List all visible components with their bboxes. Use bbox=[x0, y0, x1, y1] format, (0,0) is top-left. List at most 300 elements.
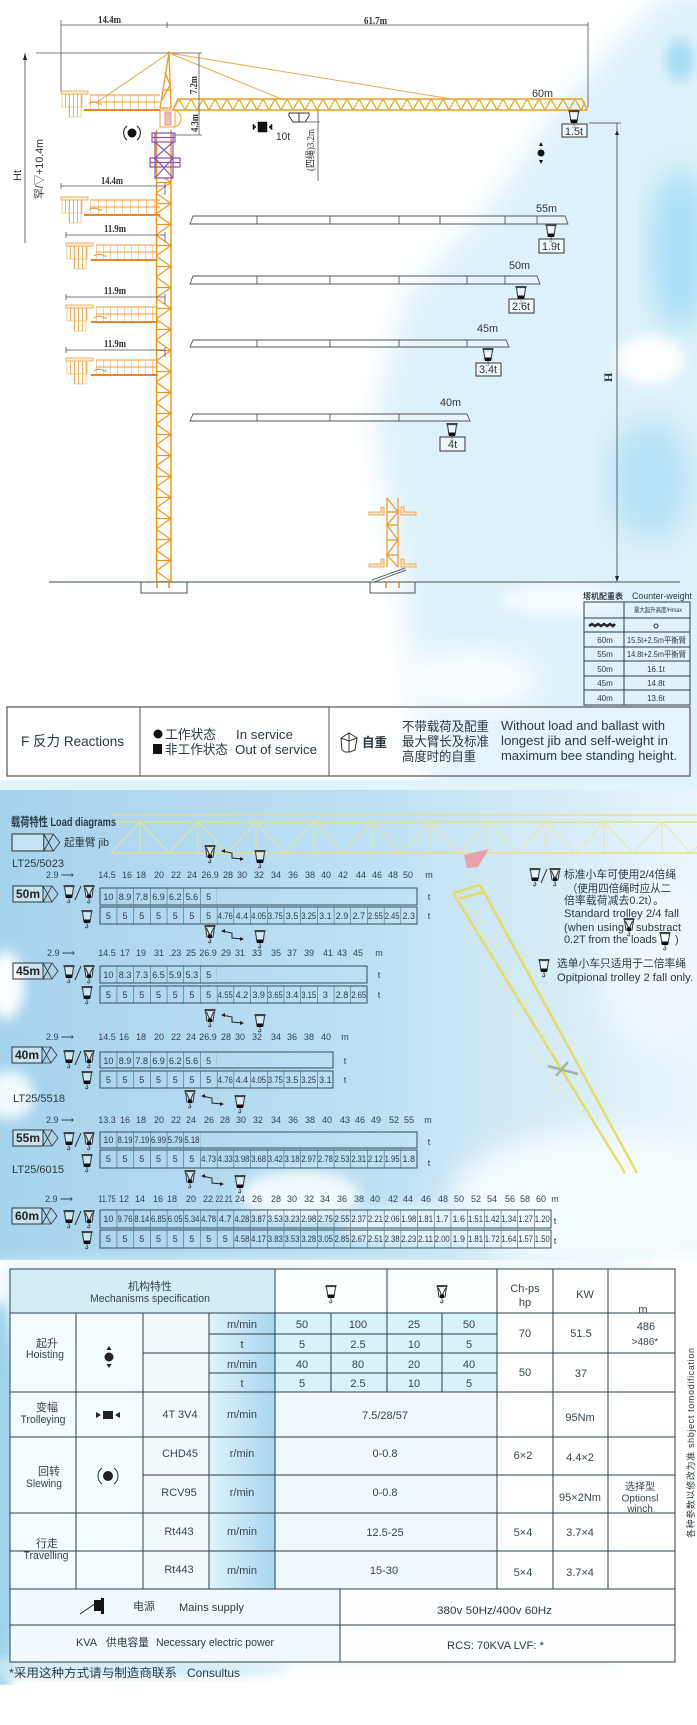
load table 50m: 24 bbox=[187, 870, 197, 880]
load table 60m: 54 bbox=[487, 1194, 497, 1204]
row: hoisting: 20 bbox=[408, 1359, 420, 1371]
header row: 机构特性 bbox=[128, 1279, 172, 1293]
main jib 60m: 1.5t bbox=[565, 126, 583, 138]
load table 50m: 5 bbox=[173, 911, 178, 921]
load table 60m: 12 bbox=[119, 1194, 129, 1204]
load table 50m: 5 bbox=[156, 911, 161, 921]
load table 55m: 34 bbox=[271, 1115, 281, 1125]
self weight description: 不带载荷及配重 bbox=[402, 719, 489, 734]
counter jib option 11.9m C: 11.9m bbox=[104, 339, 127, 350]
service states: 工作状态 bbox=[165, 727, 216, 742]
load table 40m: 18 bbox=[136, 1032, 146, 1042]
load table 60m: 1.27 bbox=[518, 1214, 533, 1224]
load table 60m: 2.75 bbox=[318, 1214, 333, 1224]
footnote: *采用这种方式请与制造商联系 bbox=[9, 1665, 177, 1680]
counter jib option 11.9m B: 11.9m bbox=[104, 286, 127, 297]
load table 50m: 14.5 bbox=[98, 870, 116, 880]
load table 60m: 2.23 bbox=[401, 1234, 416, 1244]
load table 45m: t bbox=[378, 990, 381, 1000]
load table 45m: 25 bbox=[186, 948, 196, 958]
header row: hp bbox=[519, 1297, 531, 1309]
counter-weight table: 最大起升高度/Hmax bbox=[634, 605, 683, 614]
load table 60m: 30 bbox=[287, 1194, 297, 1204]
load table 45m: 3.4 bbox=[286, 990, 298, 1000]
row: slewing: RCV95 bbox=[161, 1487, 197, 1499]
load table 50m: 36 bbox=[288, 870, 298, 880]
load table 60m: 5 bbox=[206, 1234, 211, 1244]
counter jib top bbox=[61, 91, 160, 117]
load table 55m: 2.9 ⟶ bbox=[46, 1115, 74, 1125]
load table 55m: 36 bbox=[288, 1115, 298, 1125]
load table 50m: 38 bbox=[305, 870, 315, 880]
counter-weight table: 14.8t+2.5m平衡臂 bbox=[627, 649, 686, 659]
load table 60m: 2.37 bbox=[351, 1214, 366, 1224]
load table 60m: 1.72 bbox=[485, 1234, 500, 1244]
row: travelling: 5×4 bbox=[514, 1527, 532, 1539]
load table 45m: 8.3 bbox=[119, 970, 131, 980]
load table 50m: 40 bbox=[321, 870, 331, 880]
row: hoisting: m/min bbox=[227, 1319, 257, 1331]
load table 60m: 6.85 bbox=[151, 1214, 166, 1224]
height dimension Ht: 罕/▽+10.4m bbox=[34, 139, 46, 199]
load table 45m: 45 bbox=[353, 948, 363, 958]
counter-weight table: 40m bbox=[597, 694, 613, 703]
jib legend: LT25/5023 bbox=[12, 858, 64, 870]
load table 45m: 4.2 bbox=[236, 990, 248, 1000]
load table 40m: 10 bbox=[103, 1056, 113, 1066]
row: trolleying: 95Nm bbox=[565, 1412, 595, 1424]
load table 45m: .23 bbox=[169, 948, 181, 958]
load table 60m: 4.17 bbox=[251, 1234, 266, 1244]
row: mains supply: 电源 bbox=[133, 1599, 155, 1613]
row: hoisting: 5 bbox=[299, 1378, 305, 1390]
load table 50m: m bbox=[425, 870, 433, 880]
load table 50m: 4.05 bbox=[251, 911, 266, 921]
slewing unit and climbing cage bbox=[150, 110, 181, 178]
load table 55m: 5 bbox=[173, 1154, 178, 1164]
load table 45m: 33 bbox=[252, 948, 262, 958]
load table 45m: 31 bbox=[154, 948, 164, 958]
row: trolleying bbox=[20, 1400, 595, 1426]
load table 60m: 1.57 bbox=[518, 1234, 533, 1244]
load table 55m: 20 bbox=[154, 1115, 164, 1125]
load table 40m: 40m bbox=[15, 1048, 39, 1062]
load table 55m: 3.68 bbox=[251, 1154, 266, 1164]
load table 45m: 5.3 bbox=[186, 970, 198, 980]
load table 60m: 1.98 bbox=[401, 1214, 416, 1224]
load table 45m: 5 bbox=[139, 990, 144, 1000]
counter-weight table: 55m bbox=[597, 650, 613, 659]
load table 55m: 3.42 bbox=[268, 1154, 283, 1164]
load table 45m: 5 bbox=[206, 970, 211, 980]
load table 55m: t bbox=[428, 1137, 431, 1147]
load table 50m: 18 bbox=[136, 870, 146, 880]
row: slewing: 6×2 bbox=[514, 1450, 532, 1462]
trolley notes: substract bbox=[636, 922, 681, 934]
load table 55m: 3.18 bbox=[284, 1154, 300, 1164]
load table 60m: 16 bbox=[153, 1194, 163, 1204]
load table 45m: 5 bbox=[206, 990, 211, 1000]
load table 60m: 4.58 bbox=[234, 1234, 249, 1244]
counter-weight table: 16.1t bbox=[647, 665, 666, 674]
trolley notes: Standard trolley 2/4 fall bbox=[564, 908, 679, 920]
table shading bbox=[10, 1269, 675, 1662]
trolley notes: 倍率载荷减去0.2t）。 bbox=[564, 893, 664, 907]
row: hoisting: 51.5 bbox=[570, 1328, 592, 1340]
load table 40m: 40 bbox=[321, 1032, 331, 1042]
load table 60m: 1.81 bbox=[418, 1214, 433, 1224]
load table 60m: 14 bbox=[135, 1194, 145, 1204]
header row: m bbox=[638, 1304, 648, 1316]
trolley and 10t load with hook height: 10t bbox=[276, 131, 290, 143]
load table 40m: 32 bbox=[252, 1032, 262, 1042]
load table 40m: 6.9 bbox=[152, 1056, 165, 1066]
load table 40m: 34 bbox=[271, 1032, 281, 1042]
load table 40m: 22 bbox=[171, 1032, 181, 1042]
load table 40m: 36 bbox=[287, 1032, 297, 1042]
trolley notes: 标准小车可使用2/4倍绳 bbox=[564, 867, 676, 881]
trolley and 10t load with hook height bbox=[253, 110, 320, 181]
row: necessary electric power: RCS: 70KVA LVF: * bbox=[447, 1640, 545, 1652]
load table 50m: t bbox=[428, 892, 431, 902]
row: travelling: m/min bbox=[227, 1526, 257, 1538]
row: hoisting: Hoisting bbox=[26, 1349, 64, 1361]
row: slewing: 回转 bbox=[38, 1464, 60, 1478]
load table 50m: 42 bbox=[338, 870, 348, 880]
row: hoisting: t bbox=[240, 1378, 244, 1390]
row: hoisting: 2.5 bbox=[350, 1339, 366, 1351]
trolley notes: Opitpional trolley 2 fall only. bbox=[557, 972, 693, 984]
load table 60m: 2.00 bbox=[435, 1234, 450, 1244]
height dimension Ht bbox=[12, 53, 46, 243]
load table 55m: 1.95 bbox=[385, 1154, 400, 1164]
counter-weight table: 塔机配重表 bbox=[583, 591, 623, 601]
load table 50m: 5.6 bbox=[186, 892, 198, 902]
erection mast section bbox=[369, 498, 416, 567]
counter jib option 11.9m B bbox=[66, 286, 165, 331]
icon: hoisting bbox=[538, 142, 544, 164]
row: hoisting: 10 bbox=[408, 1339, 420, 1351]
load table 60m: 2.98 bbox=[301, 1214, 316, 1224]
counter jib option 14.4m: 14.4m bbox=[101, 176, 124, 187]
load table 40m: 28 bbox=[221, 1032, 231, 1042]
trolley notes: 0.2T from the loads bbox=[564, 934, 658, 946]
load table 45m: 10 bbox=[103, 970, 113, 980]
load table 55m: 6.99 bbox=[151, 1135, 166, 1145]
counter-weight table: 13.6t bbox=[647, 694, 666, 703]
counter-weight table: 60m bbox=[597, 636, 613, 645]
load table 50m: 10 bbox=[103, 892, 113, 902]
load table 45m: 5 bbox=[173, 990, 178, 1000]
load table 60m: 5 bbox=[139, 1234, 144, 1244]
row: travelling: Rt443 bbox=[164, 1526, 194, 1538]
load table 50m: 22 bbox=[171, 870, 181, 880]
load table 60m: 50 bbox=[454, 1194, 464, 1204]
jib option 50m: 2.6t bbox=[512, 301, 530, 313]
table grid lines bbox=[10, 1269, 675, 1662]
self weight description: maximum bee standing height. bbox=[501, 748, 677, 763]
counter-weight table: 14.8t bbox=[647, 679, 666, 688]
reactions label: F 反力 Reactions bbox=[21, 733, 124, 749]
row: hoisting: 5 bbox=[466, 1378, 472, 1390]
load table 45m: 2.65 bbox=[351, 990, 366, 1000]
load table 60m: 22 bbox=[203, 1194, 213, 1204]
load table 60m: 28 bbox=[271, 1194, 281, 1204]
jib option 45m: 45m bbox=[477, 323, 498, 335]
load table 60m: 52 bbox=[471, 1194, 481, 1204]
load table 40m: 5 bbox=[106, 1075, 111, 1085]
load table 40m: 20 bbox=[154, 1032, 164, 1042]
load table 40m: 4.76 bbox=[218, 1075, 233, 1085]
self weight description bbox=[402, 718, 677, 764]
load table 60m: 11.75 bbox=[98, 1194, 116, 1204]
load table 55m: 32 bbox=[253, 1115, 263, 1125]
load table 55m: 5.18 bbox=[184, 1135, 199, 1145]
load table 45m: 37 bbox=[287, 948, 297, 958]
load table 60m: 24 bbox=[235, 1194, 245, 1204]
load table 60m: 20 bbox=[186, 1194, 196, 1204]
ground line and foundations bbox=[49, 568, 680, 593]
load table 55m: 2.53 bbox=[334, 1154, 350, 1164]
load table 45m: 5 bbox=[106, 990, 111, 1000]
mechanisms specification table bbox=[10, 1269, 675, 1662]
row: hoisting: 40 bbox=[296, 1359, 308, 1371]
load table 40m: t bbox=[344, 1056, 347, 1066]
load table 60m: 42 bbox=[388, 1194, 398, 1204]
load table 55m: 13.3 bbox=[98, 1115, 116, 1125]
header row: Mechanisms specification bbox=[90, 1293, 210, 1305]
row: hoisting: t bbox=[240, 1339, 244, 1351]
row: mains supply: 380v 50Hz/400v 60Hz bbox=[437, 1605, 552, 1617]
row: necessary electric power bbox=[76, 1635, 545, 1652]
load table 60m: 9.76 bbox=[118, 1214, 132, 1224]
row: hoisting: 25 bbox=[408, 1319, 420, 1331]
load table 60m: 2.55 bbox=[334, 1214, 350, 1224]
load table 50m: 2.7 bbox=[352, 911, 365, 921]
load table 50m: 30 bbox=[237, 870, 247, 880]
load table 60m bbox=[12, 1170, 559, 1249]
counter jib option 11.9m C bbox=[66, 339, 165, 384]
load table 60m: m bbox=[551, 1194, 559, 1204]
load table 60m: 60 bbox=[536, 1194, 546, 1204]
load table 50m: 48 bbox=[388, 870, 398, 880]
dimension: overall jib lengths: 14.4m bbox=[98, 15, 122, 26]
load table 50m: 34 bbox=[271, 870, 281, 880]
load table 55m: 3.98 bbox=[234, 1154, 249, 1164]
dimension: overall jib lengths bbox=[61, 15, 588, 108]
load table 50m: 16 bbox=[122, 870, 132, 880]
load table 40m: 5.6 bbox=[186, 1056, 198, 1066]
load table 40m: 26.9 bbox=[199, 1032, 217, 1042]
load table 45m: 7.3 bbox=[136, 970, 148, 980]
load table 50m: 28 bbox=[223, 870, 233, 880]
row: trolleying: Trolleying bbox=[20, 1414, 66, 1426]
load table 60m: 1.50 bbox=[535, 1234, 550, 1244]
load table 55m: 28 bbox=[220, 1115, 230, 1125]
row: hoisting: 37 bbox=[575, 1368, 587, 1380]
load table 40m: 5 bbox=[189, 1075, 194, 1085]
service states: 非工作状态 bbox=[165, 742, 228, 757]
load table 55m: 8.19 bbox=[118, 1135, 132, 1145]
load table 60m: 2.9 ⟶ bbox=[45, 1194, 73, 1204]
row: travelling: Rt443 bbox=[164, 1564, 194, 1576]
load table 50m: 50 bbox=[403, 870, 413, 880]
load table 55m: 46 bbox=[355, 1115, 365, 1125]
jib option 45m bbox=[190, 323, 509, 376]
row: travelling: 3.7×4 bbox=[566, 1567, 594, 1579]
load table 40m: 3.75 bbox=[268, 1075, 283, 1085]
load table 40m: 24 bbox=[186, 1032, 196, 1042]
load table 50m: 7.8 bbox=[136, 892, 148, 902]
row: hoisting: 50 bbox=[296, 1319, 308, 1331]
row: necessary electric power: 供电容量 bbox=[106, 1635, 149, 1649]
row: slewing: winch bbox=[626, 1504, 653, 1515]
dimension 7.2m and 4.3m: 4.3m bbox=[190, 113, 201, 132]
load table 60m: 5 bbox=[122, 1234, 128, 1244]
load table 45m: 6.5 bbox=[152, 970, 165, 980]
load table 60m: 3.23 bbox=[284, 1214, 300, 1224]
trolley and 10t load with hook height: (四绳)3.2m bbox=[304, 129, 317, 171]
jib option 55m: 55m bbox=[536, 203, 557, 215]
footnote: Consultus bbox=[187, 1666, 240, 1680]
jib option 40m: 40m bbox=[440, 397, 461, 409]
load table 50m: 2.3 bbox=[403, 911, 415, 921]
row: hoisting: 起升 bbox=[36, 1337, 58, 1350]
load table 40m: 3.25 bbox=[301, 1075, 316, 1085]
load table 60m: 60m bbox=[15, 1209, 39, 1223]
load table 60m: 32 bbox=[304, 1194, 314, 1204]
model label LT25/6015: LT25/6015 bbox=[12, 1164, 64, 1176]
load table 45m: 3 bbox=[323, 990, 328, 1000]
row: travelling: m/min bbox=[227, 1565, 257, 1577]
load table 55m: 2.12 bbox=[368, 1154, 383, 1164]
icon: self weight bbox=[341, 733, 357, 752]
load table 55m: 2.31 bbox=[351, 1154, 366, 1164]
load table 50m: 3.25 bbox=[301, 911, 316, 921]
load table 60m: 3.87 bbox=[251, 1214, 266, 1224]
load table 55m: 4.33 bbox=[218, 1154, 233, 1164]
row: necessary electric power: KVA bbox=[76, 1637, 98, 1649]
counter-weight table bbox=[583, 591, 692, 705]
row: hoisting bbox=[26, 1319, 658, 1390]
counter jib option 11.9m A: 11.9m bbox=[104, 224, 127, 235]
load table 50m: 3.5 bbox=[286, 911, 298, 921]
service states bbox=[153, 727, 317, 757]
load table 60m: 48 bbox=[438, 1194, 448, 1204]
service states: In service bbox=[236, 727, 293, 742]
load table 40m: 30 bbox=[235, 1032, 245, 1042]
load table 45m: 31 bbox=[235, 948, 245, 958]
load table 55m: 4.73 bbox=[201, 1154, 216, 1164]
load table 55m: 16 bbox=[120, 1115, 130, 1125]
load table 45m: 5.9 bbox=[169, 970, 181, 980]
row: hoisting: >486* bbox=[632, 1337, 658, 1348]
load table 40m: 14.5 bbox=[98, 1032, 116, 1042]
load table 45m: m bbox=[375, 948, 383, 958]
jib option 55m bbox=[190, 203, 568, 253]
load table 60m: 18 bbox=[167, 1194, 177, 1204]
load table 45m: 2.8 bbox=[336, 990, 348, 1000]
load table 60m: 44 bbox=[403, 1194, 413, 1204]
load table 60m: 1.20 bbox=[535, 1214, 550, 1224]
load table 60m: t bbox=[554, 1236, 557, 1246]
load table 40m: m bbox=[341, 1032, 349, 1042]
load table 40m: 16 bbox=[119, 1032, 129, 1042]
load table 60m: 6.05 bbox=[168, 1214, 183, 1224]
load table 60m: 1.34 bbox=[501, 1214, 516, 1224]
load table 60m: 40 bbox=[370, 1194, 380, 1204]
load table 60m: 56 bbox=[505, 1194, 515, 1204]
load table 45m: 3.15 bbox=[301, 990, 316, 1000]
load table 60m: 4.28 bbox=[234, 1214, 249, 1224]
main crane elevation drawing bbox=[12, 15, 680, 593]
model label LT25/5518: LT25/5518 bbox=[13, 1093, 65, 1105]
load table 60m: 34 bbox=[320, 1194, 330, 1204]
counter-weight table: 45m bbox=[597, 679, 613, 688]
load table 45m: 29 bbox=[221, 948, 231, 958]
row: hoisting: 40 bbox=[463, 1359, 475, 1371]
trolley notes bbox=[530, 867, 693, 984]
load table 50m: 5 bbox=[206, 911, 211, 921]
load table 50m: 6.9 bbox=[152, 892, 165, 902]
load table 45m: 5 bbox=[189, 990, 194, 1000]
load table 50m: 32 bbox=[254, 870, 264, 880]
row: trolleying: 变幅 bbox=[36, 1400, 58, 1414]
counter-weight table: 50m bbox=[597, 665, 613, 674]
self weight label: 自重 bbox=[362, 735, 387, 750]
row: travelling bbox=[24, 1526, 594, 1579]
load table 60m: 46 bbox=[421, 1194, 431, 1204]
row: trolleying: 7.5/28/57 bbox=[362, 1410, 408, 1422]
load table 60m: 26 bbox=[252, 1194, 262, 1204]
self weight description: longest jib and self-weight in bbox=[501, 733, 668, 748]
load table 40m: 38 bbox=[304, 1032, 314, 1042]
load table 50m: 2.9 ⟶ bbox=[46, 870, 74, 880]
load table 60m: 5 bbox=[223, 1234, 228, 1244]
load table 60m: 1.42 bbox=[485, 1214, 500, 1224]
row: slewing: 4.4×2 bbox=[566, 1452, 594, 1464]
self weight description: 高度时的自重 bbox=[402, 749, 476, 764]
load table 50m: 5 bbox=[189, 911, 194, 921]
vertical side note: 各种参数以修改为准 shbject tomodification bbox=[685, 1348, 696, 1538]
load table 45m: 35 bbox=[271, 948, 281, 958]
load table 45m: 5 bbox=[156, 990, 161, 1000]
height dimension H bbox=[589, 123, 621, 582]
trolley notes: ) bbox=[675, 934, 679, 946]
trolley notes: 选单小车只适用于二倍率绳 bbox=[557, 956, 686, 970]
load table 45m: 45m bbox=[16, 964, 40, 978]
load table 60m: 3.53 bbox=[268, 1214, 283, 1224]
load table 60m: 5 bbox=[156, 1234, 161, 1244]
load table 40m: 2.9 ⟶ bbox=[46, 1032, 74, 1042]
row: trolleying: 4T 3V4 bbox=[162, 1409, 198, 1421]
load table 55m: 24 bbox=[186, 1115, 196, 1125]
load table 50m: 5 bbox=[106, 911, 111, 921]
load table 50m: 3.75 bbox=[268, 911, 283, 921]
row: hoisting: 10 bbox=[408, 1378, 420, 1390]
jib option 55m: 1.9t bbox=[542, 241, 560, 253]
load table 45m: 3.9 bbox=[252, 990, 265, 1000]
load table 50m bbox=[13, 845, 433, 928]
load table 60m: 2.51 bbox=[368, 1234, 383, 1244]
load table 40m: 6.2 bbox=[169, 1056, 181, 1066]
row: slewing bbox=[26, 1448, 658, 1515]
load table 60m: 3.28 bbox=[301, 1234, 316, 1244]
load table 40m: 5 bbox=[206, 1075, 211, 1085]
row: slewing: CHD45 bbox=[162, 1448, 198, 1460]
load table 50m: 4.76 bbox=[218, 911, 233, 921]
load table 60m: 4.78 bbox=[201, 1214, 216, 1224]
